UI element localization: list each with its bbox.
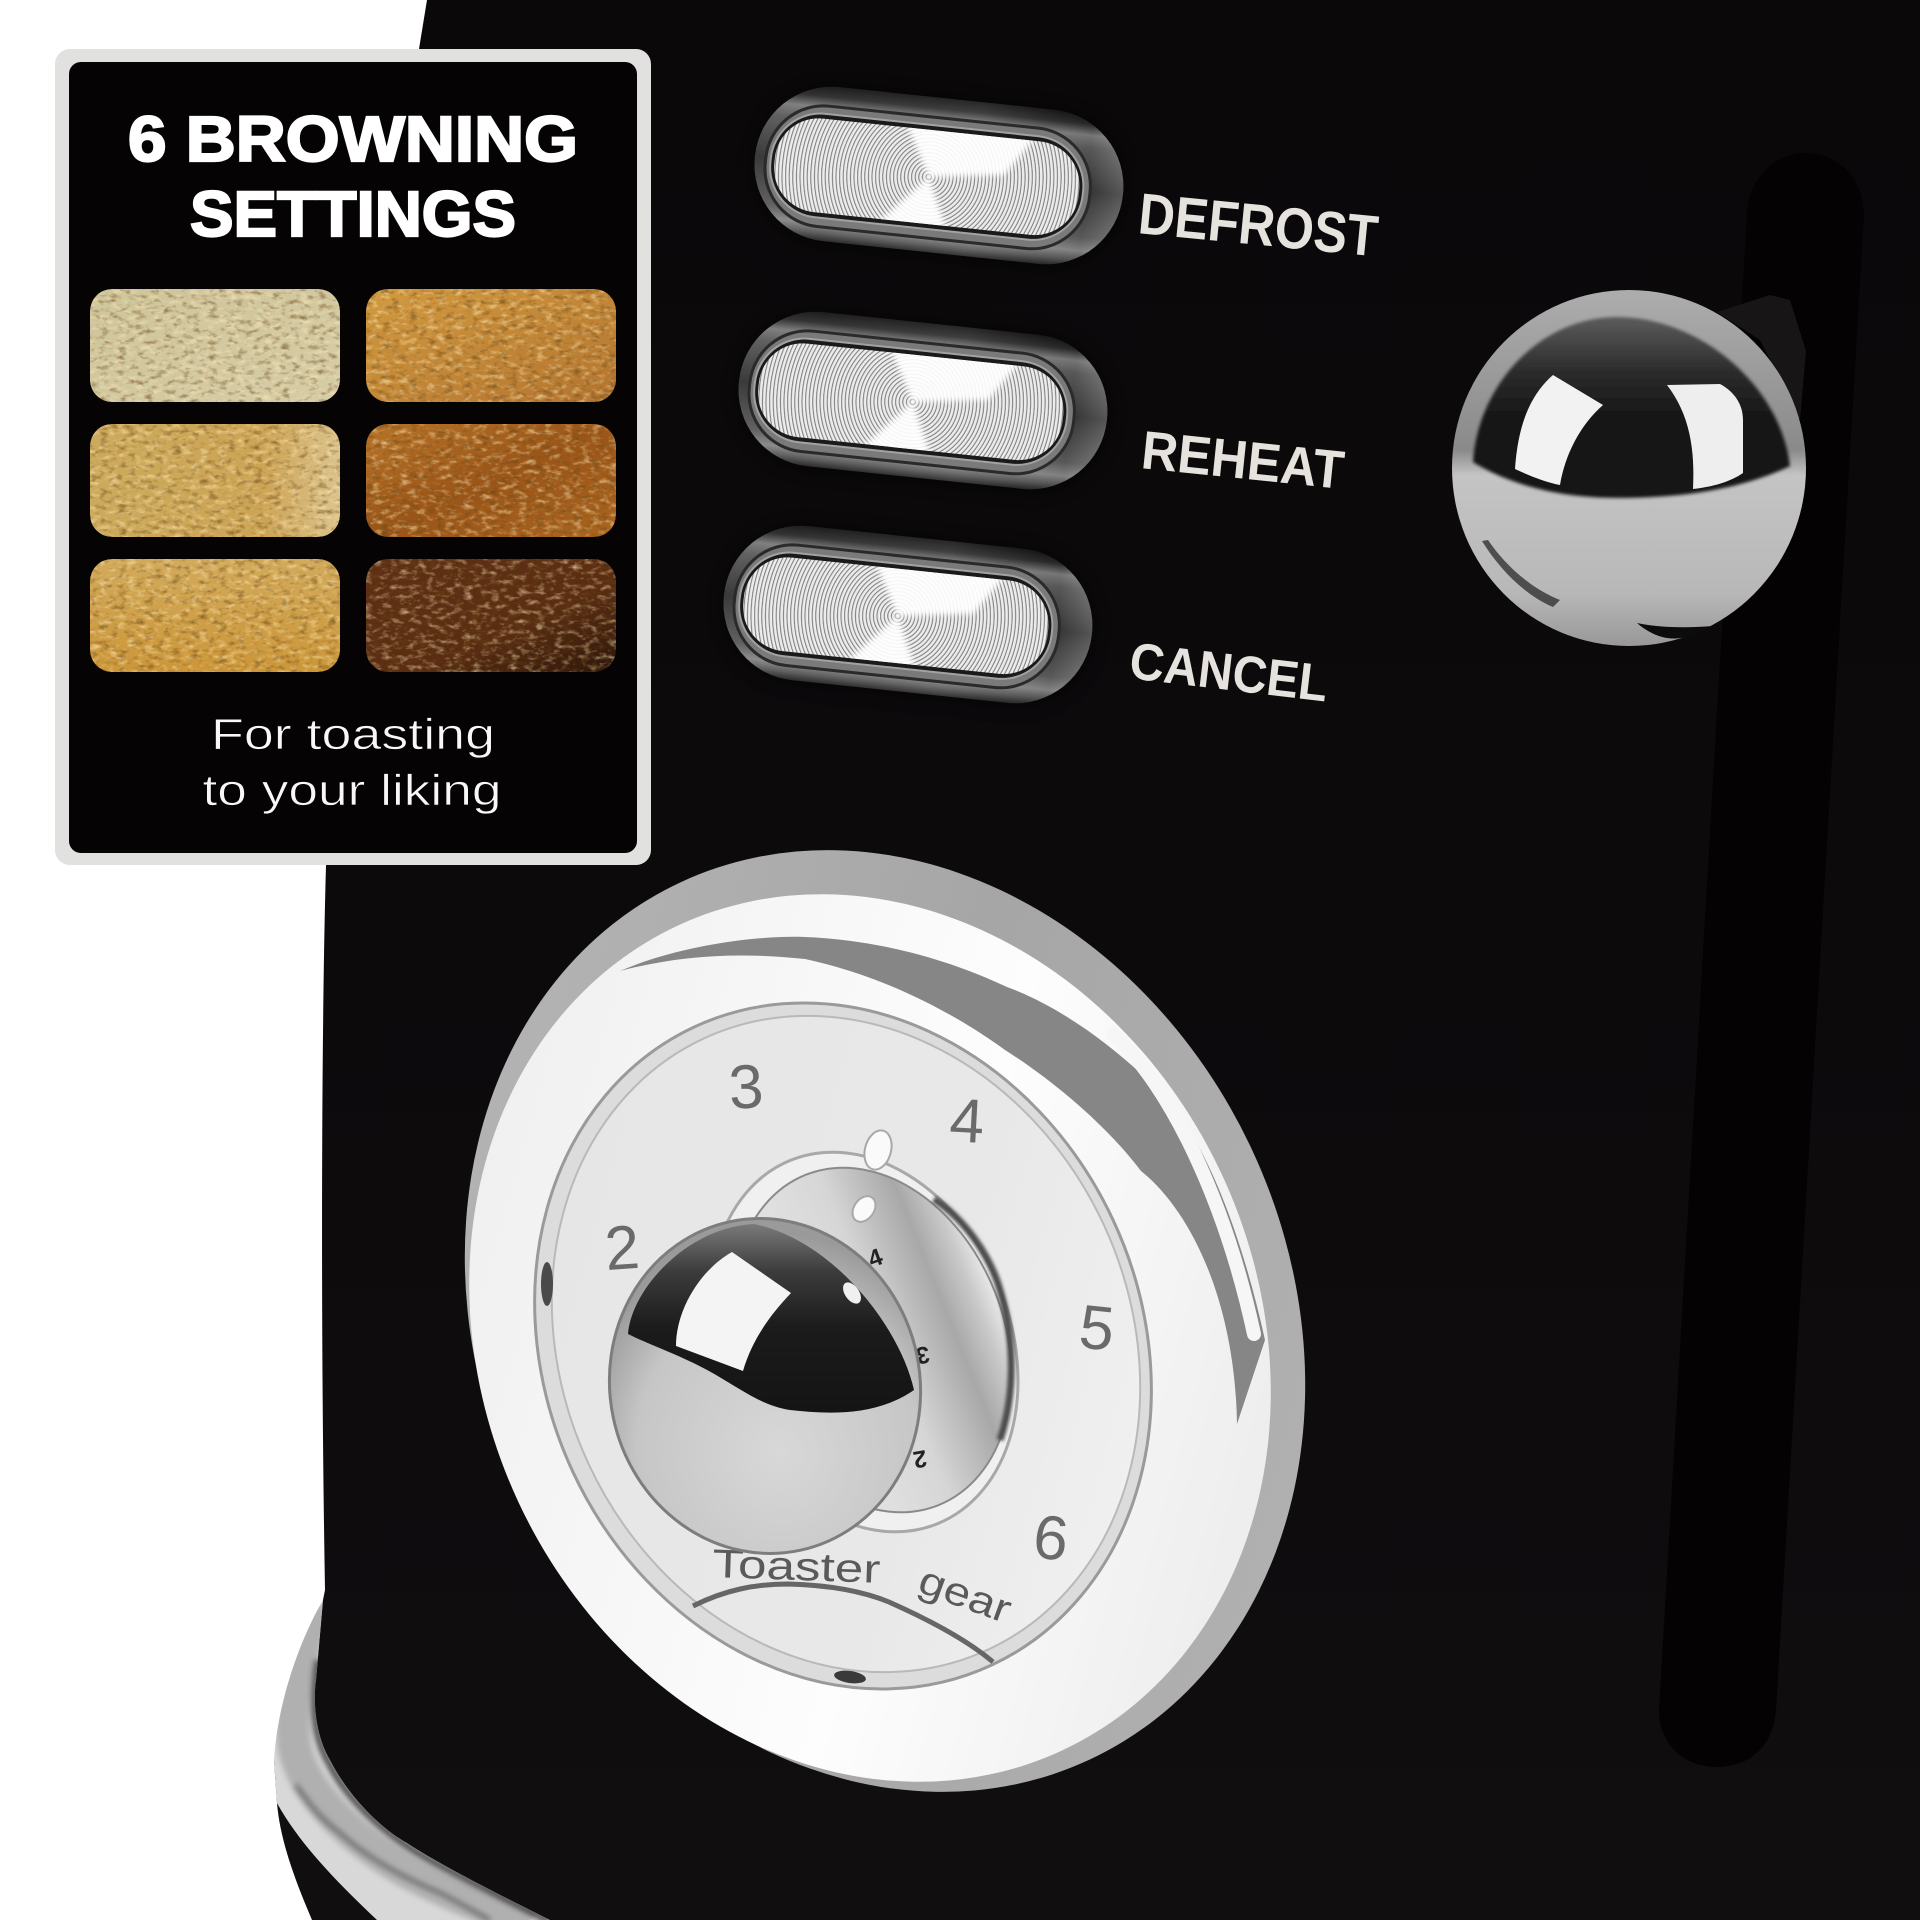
knob pointer marks [848, 1127, 896, 1226]
knob stem halo [655, 1106, 1073, 1578]
knob small highlight [839, 1279, 865, 1307]
caption [202, 710, 502, 815]
knob stem small numbers: 3 [914, 1340, 932, 1369]
dial caption: gear: gear [913, 1558, 1017, 1632]
dial numbers [602, 1052, 1118, 1575]
label: reheat: REHEAT [1139, 420, 1347, 501]
button: reheat [731, 304, 1117, 500]
knob stem small numbers [865, 1243, 932, 1473]
knob stem small numbers: 4 [865, 1243, 887, 1273]
dial numbers: 2 [602, 1213, 642, 1284]
dial arc line [693, 1584, 993, 1662]
dial numbers: 6 [1030, 1502, 1072, 1575]
knob highlight [676, 1252, 791, 1371]
knob stem [683, 1126, 1061, 1554]
lever ball right highlight [1667, 384, 1743, 489]
chrome lever ball [1452, 290, 1806, 646]
knob stem chrome grooves [934, 1199, 1011, 1440]
toast level 5 [366, 424, 616, 537]
chrome base band [274, 1600, 550, 1920]
label: defrost: DEFROST [1136, 181, 1381, 269]
dial outer chrome rim [313, 711, 1457, 1920]
dial window ring [424, 901, 1262, 1791]
dial numbers: 5 [1076, 1292, 1118, 1365]
toast level 4 [366, 289, 616, 402]
label: cancel: CANCEL [1127, 632, 1331, 713]
heading: SETTINGS [190, 178, 516, 250]
chrome knob ball [578, 1189, 952, 1583]
caption: For toasting [211, 710, 495, 759]
button: defrost [747, 79, 1133, 275]
dial numbers: 4 [948, 1086, 986, 1157]
panel frame [55, 49, 651, 865]
knob dark reflection [628, 1224, 914, 1413]
panel background [69, 62, 637, 853]
dial numbers: 3 [727, 1052, 765, 1123]
lever ball left highlight [1515, 375, 1603, 485]
dial white rim [326, 762, 1414, 1914]
button: cancel [716, 518, 1102, 714]
browning dial [313, 711, 1457, 1920]
toaster lever slot [1659, 153, 1864, 1767]
lever ball dark reflection [1473, 317, 1790, 498]
knob stem small numbers: 2 [911, 1444, 929, 1473]
dial white streak [1113, 1034, 1254, 1334]
lever ball lower reflections [1482, 540, 1560, 607]
toast level 2 [90, 424, 340, 537]
toast level 3 [90, 559, 340, 672]
toast level 6 [366, 559, 616, 672]
heading [128, 103, 578, 250]
heading: 6 BROWNING [128, 103, 578, 175]
dial face [446, 919, 1246, 1769]
dial bottom screw [833, 1669, 867, 1685]
toast swatches [90, 289, 616, 672]
dial left dark spot [541, 1262, 553, 1306]
dial gray reflection stripe [620, 937, 1265, 1424]
toast level 1 [90, 289, 340, 402]
caption: to your liking [202, 766, 502, 815]
dial caption: toaster: Toaster [712, 1542, 881, 1592]
panel: browning settings [55, 49, 651, 865]
lever bracket [1717, 295, 1806, 420]
